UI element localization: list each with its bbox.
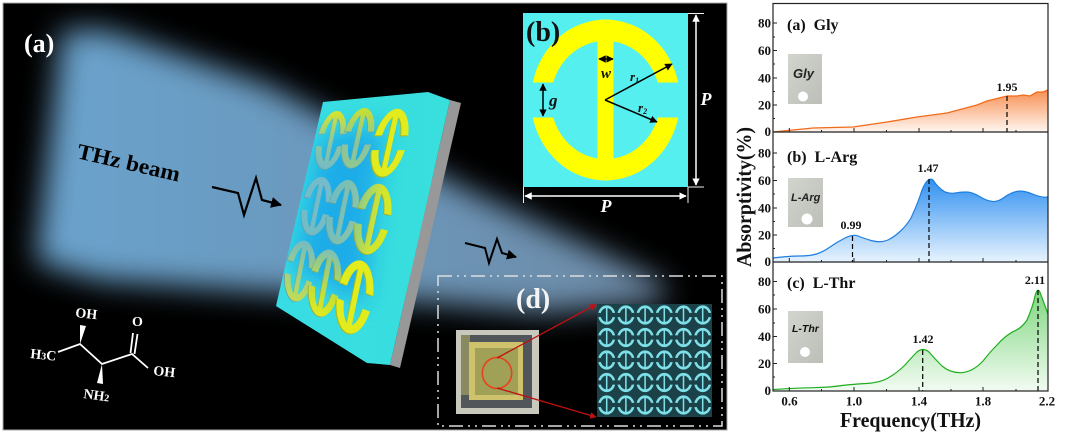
y axis tick labels: 40 bbox=[758, 70, 771, 86]
radius r2: 2 bbox=[642, 107, 647, 116]
THz beam glow bbox=[36, 30, 665, 312]
panel: L-Arg curve: (b) L-Arg bbox=[787, 149, 857, 166]
x axis tick labels: 1.8 bbox=[975, 394, 992, 408]
x axis tick labels bbox=[781, 394, 1055, 408]
panel (d): fabricated sample bbox=[438, 276, 722, 426]
dimension w bbox=[599, 59, 613, 82]
panel: Gly curve: 1.95 bbox=[996, 80, 1018, 94]
x axis title: Frequency(THz) bbox=[840, 408, 981, 432]
metasurface 3D slab bbox=[276, 92, 461, 368]
radius r1: r bbox=[630, 69, 635, 84]
arrow: incoming pulse bbox=[212, 178, 281, 215]
molecule: L-threonine: O bbox=[132, 315, 143, 330]
panel: Gly curve bbox=[773, 17, 1048, 132]
panel label (b): (b) bbox=[526, 17, 560, 48]
y axis tick labels: 80 bbox=[758, 146, 771, 160]
y axis tick labels: 80 bbox=[758, 274, 771, 289]
radius r2: r bbox=[638, 100, 643, 115]
sample photo bbox=[456, 330, 539, 414]
y axis tick labels: 40 bbox=[758, 200, 771, 216]
chart: absorptivity spectra bbox=[732, 4, 1055, 432]
radius r1 bbox=[605, 64, 672, 100]
metasurface resonators bbox=[279, 108, 414, 341]
radius r2 bbox=[605, 100, 657, 122]
panel: L-Thr curve: 1.42 bbox=[912, 332, 934, 346]
x axis tick labels: 2.2 bbox=[1039, 394, 1055, 408]
panel label (a): (a) bbox=[24, 29, 54, 58]
sample photo: L-Thr bbox=[788, 311, 823, 363]
arrow: transmitted pulse bbox=[465, 239, 516, 263]
molecule: L-threonine: H3C bbox=[30, 347, 57, 365]
dimension P vertical: P bbox=[700, 89, 712, 109]
panel: L-Arg curve bbox=[773, 149, 1048, 262]
y axis tick labels bbox=[758, 16, 771, 398]
molecule: L-threonine: OH bbox=[75, 306, 98, 323]
y axis tick labels: 0 bbox=[764, 383, 771, 398]
y axis tick labels: 0 bbox=[764, 254, 771, 269]
magnification circle bbox=[482, 358, 512, 388]
panel: L-Thr curve bbox=[773, 273, 1048, 391]
sample photo: L-Thr: L-Thr bbox=[792, 323, 820, 335]
sample photo: L-Arg bbox=[788, 178, 823, 227]
chart axes frame and ticks bbox=[773, 4, 1048, 391]
molecule: L-threonine: OH bbox=[153, 364, 176, 381]
y axis title: Absorptivity(%) bbox=[732, 127, 756, 267]
panel label (d): (d) bbox=[516, 284, 550, 315]
molecule: L-threonine bbox=[30, 306, 176, 406]
molecule: L-threonine: NH2 bbox=[82, 387, 110, 406]
sample photo: Gly: Gly bbox=[793, 66, 815, 81]
y axis tick labels: 60 bbox=[758, 173, 771, 188]
y axis tick labels: 60 bbox=[758, 43, 771, 58]
x axis tick labels: 1.0 bbox=[846, 394, 862, 408]
panel: L-Thr curve: 2.11 bbox=[1025, 273, 1045, 287]
panel: Gly curve: (a) Gly bbox=[787, 17, 839, 34]
panel (b): unit cell diagram bbox=[523, 13, 712, 216]
panel: L-Arg curve: 1.47 bbox=[918, 161, 938, 175]
y axis tick labels: 20 bbox=[758, 98, 771, 112]
y axis tick labels: 80 bbox=[758, 16, 771, 30]
y axis tick labels: 0 bbox=[764, 124, 771, 139]
arrow: magnify upper bbox=[497, 304, 596, 358]
dimension P vertical bbox=[688, 14, 712, 187]
dimension P horizontal: P bbox=[600, 196, 612, 216]
sample photo: Gly bbox=[788, 54, 822, 104]
y axis tick labels: 60 bbox=[758, 302, 771, 316]
dimension w: w bbox=[601, 66, 612, 82]
arrow: magnify lower bbox=[497, 388, 596, 417]
y axis tick labels: 20 bbox=[758, 356, 771, 371]
dimension P horizontal bbox=[524, 187, 688, 216]
panel: L-Arg curve: 0.99 bbox=[840, 218, 862, 232]
x axis tick labels: 1.4 bbox=[911, 394, 928, 408]
dimension g bbox=[543, 84, 558, 116]
panel: THz beam illustration bbox=[3, 3, 727, 430]
y axis tick labels: 20 bbox=[758, 228, 771, 242]
THz beam label: THz beam bbox=[75, 139, 183, 186]
y axis tick labels: 40 bbox=[758, 329, 771, 344]
dimension g: g bbox=[548, 91, 558, 110]
sample photo: L-Arg: L-Arg bbox=[791, 192, 821, 204]
x axis tick labels: 0.6 bbox=[781, 394, 798, 408]
microscope image of array bbox=[597, 304, 712, 417]
radius r1: 1 bbox=[635, 76, 639, 85]
panel: L-Thr curve: (c) L-Thr bbox=[787, 275, 855, 292]
